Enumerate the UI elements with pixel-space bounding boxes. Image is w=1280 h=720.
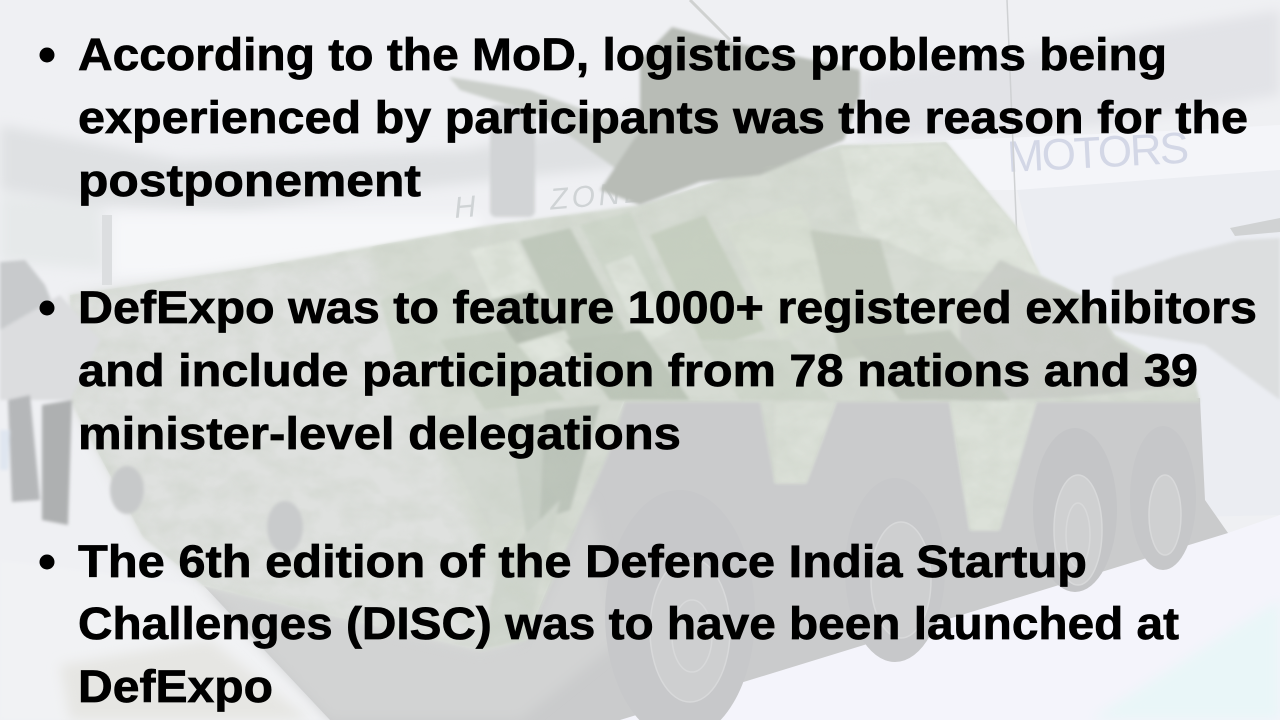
background vehicle on right: [1110, 238, 1280, 400]
wheels: [605, 426, 1196, 720]
armoured vehicle hull: [70, 142, 1200, 650]
right wall: [1017, 170, 1280, 517]
bullet dot: [40, 554, 54, 570]
speckled floor: [60, 640, 310, 720]
camouflage fine texture: [80, 164, 1000, 642]
bullet 3: [40, 536, 1179, 712]
HORIZONE sign: H ZONE: [453, 175, 646, 225]
text block 1: experienced by participants was the reason for the: [78, 92, 1248, 143]
text block 3: Challenges (DISC) was to have been launched at: [78, 598, 1179, 649]
turret arm: [449, 77, 640, 175]
text block 3: [78, 536, 1179, 712]
bullet dot: [40, 300, 54, 316]
turret: [600, 27, 860, 205]
text block 1: [78, 29, 1248, 206]
text block 2: DefExpo was to feature 1000+ registered exhibitors: [78, 282, 1257, 333]
stand post: [490, 105, 535, 217]
stand back wall and sign: [840, 125, 1280, 190]
camouflage stripes: [380, 205, 1036, 650]
pale panel beside turret: [840, 144, 1040, 275]
text block 2: and include participation from 78 nations and 39: [78, 345, 1198, 396]
front hull paler area: [70, 255, 520, 650]
undercarriage: [204, 398, 1228, 720]
bullet 2: [40, 282, 1257, 459]
text block 1: According to the MoD, logistics problems being: [78, 29, 1167, 80]
floor white: [0, 560, 330, 720]
darker rear hull: [960, 260, 1195, 400]
people on left: [0, 260, 100, 525]
text block 2: [78, 282, 1257, 459]
text block 3: DefExpo: [78, 661, 273, 712]
text block 1: postponement: [78, 155, 421, 206]
bullet 1: [40, 29, 1248, 206]
hull bolts: [110, 466, 144, 514]
background: faded photo of armoured vehicle at expo: MOTORS: [1006, 124, 1190, 182]
bullet dot: [40, 48, 54, 62]
text block 3: The 6th edition of the Defence India Startup: [78, 536, 1087, 587]
text block 2: minister-level delegations: [78, 408, 681, 459]
